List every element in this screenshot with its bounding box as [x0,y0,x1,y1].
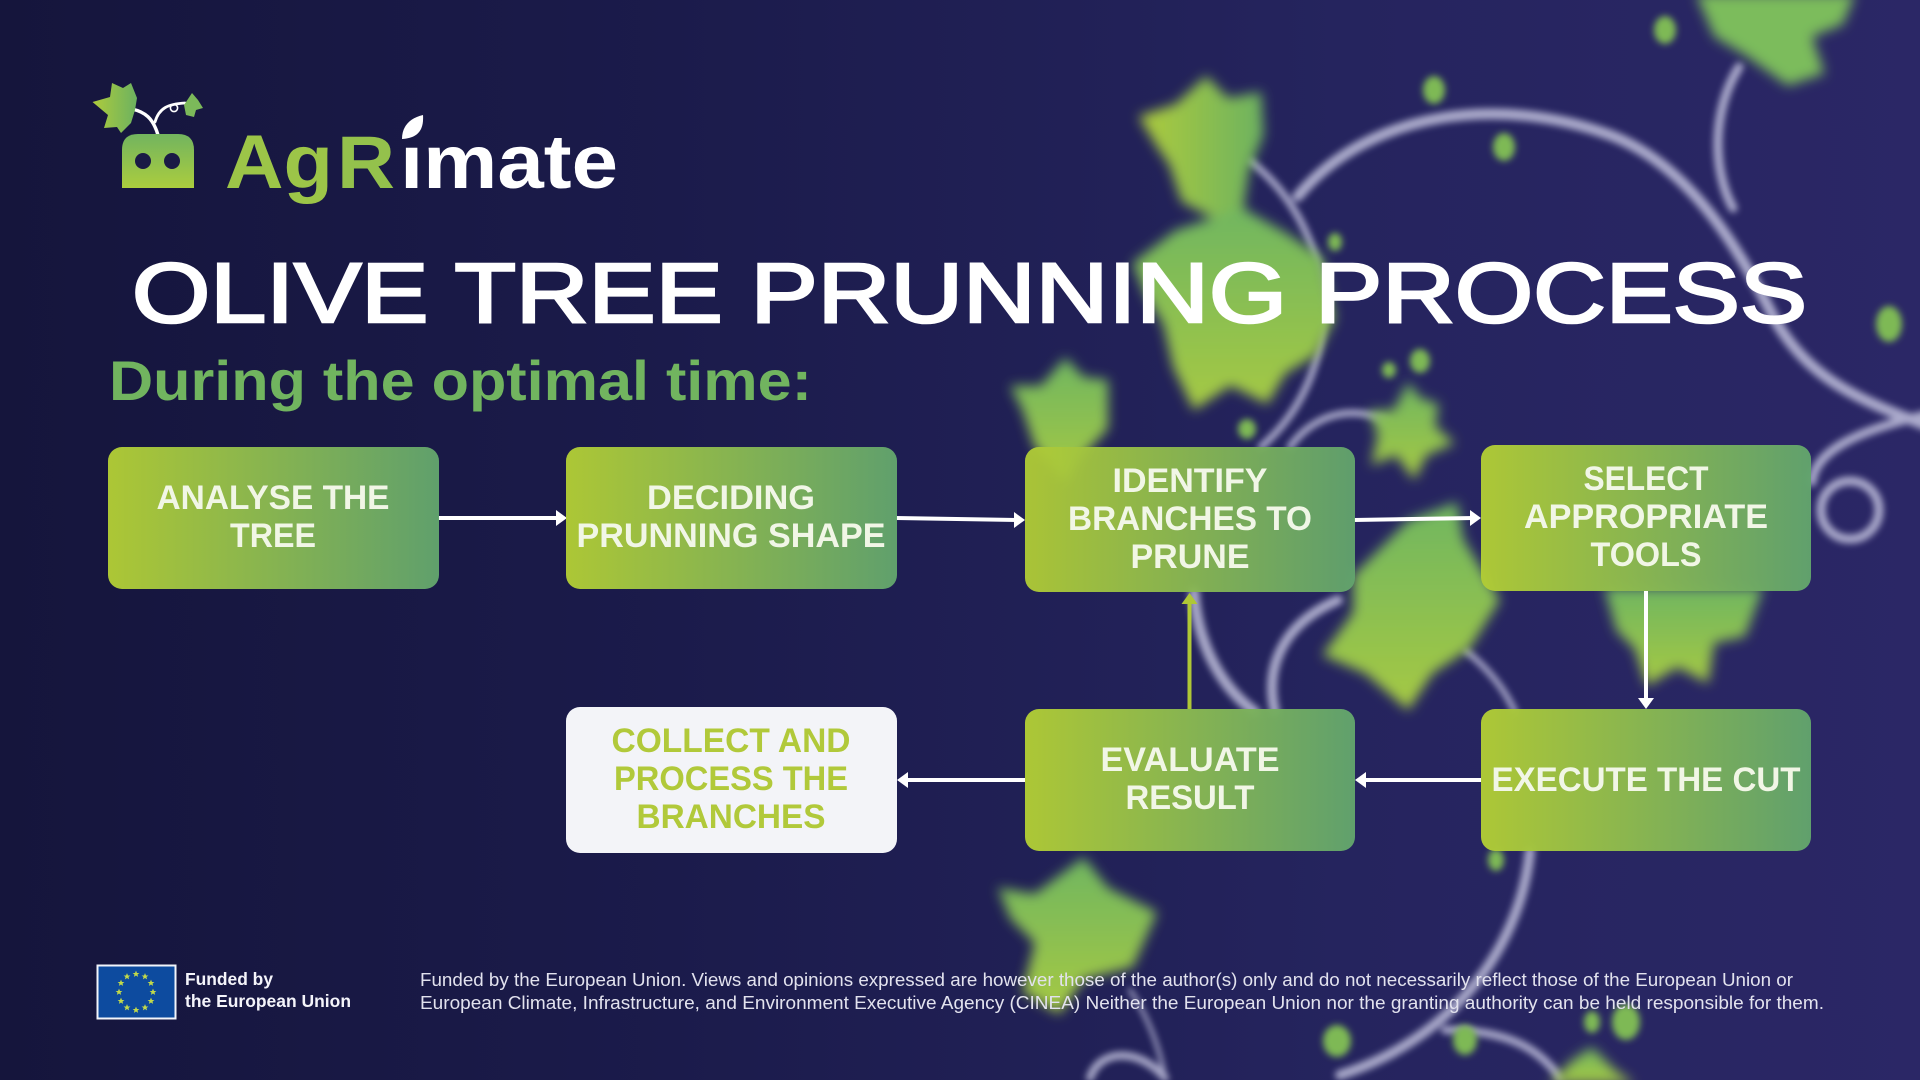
disclaimer [420,970,1824,1013]
step: evaluate result: EVALUATE [1100,741,1280,779]
title: OLIVE TREE PRUNNING PROCESS [132,246,1807,340]
step: identify branches to prune: IDENTIFY [1112,462,1268,500]
icon: leaf over i [402,115,423,139]
step: deciding prunning shape [566,447,897,589]
logo wordmark Ag: Ag [225,120,333,205]
step: identify branches to prune [1025,447,1355,592]
step: collect and process the branches: COLLECT AND [612,722,850,760]
step: evaluate result: RESULT [1126,779,1255,817]
icon: robot head [122,134,194,188]
step: analyse the tree [108,447,439,589]
disclaimer: Funded by the European Union. Views and opinions expressed are however those of the author(s) only and do not necessarily reflect those of the European Union or [420,970,1793,990]
icon: large logo leaf [92,83,137,133]
step: evaluate result [1025,709,1355,851]
logo [92,83,618,205]
icon: logo stems [132,103,185,135]
subtitle: During the optimal time: [109,349,812,412]
arrow: select to execute [1638,591,1654,709]
icon: small logo leaf [184,93,203,117]
step: select appropriate tools: APPROPRIATE [1524,498,1768,536]
disclaimer: European Climate, Infrastructure, and Environment Executive Agency (CINEA) Neither the European Union nor the granting authority can be held responsible for them. [420,993,1824,1013]
arrow: identify to select [1354,510,1481,526]
blurred vines [1090,67,1920,1078]
funded by label: the European Union [185,991,351,1011]
icon: EU flag [98,966,176,1018]
arrow: evaluate back to identify [1182,593,1198,709]
arrow: analyse to deciding [438,510,567,526]
step: execute the cut [1481,709,1811,851]
step: collect and process the branches [566,707,897,853]
step: identify branches to prune: PRUNE [1130,538,1250,576]
blurred leaves [998,0,1855,1080]
EU funding badge [98,966,351,1018]
funded by label [185,969,351,1011]
step: collect and process the branches: PROCESS THE [614,760,848,798]
step: select appropriate tools: TOOLS [1590,536,1702,574]
step: deciding prunning shape: PRUNNING SHAPE [576,517,886,555]
logo wordmark imate: ımate [400,120,618,205]
arrow: evaluate to collect [897,772,1025,788]
step: identify branches to prune: BRANCHES TO [1068,500,1312,538]
blurred small leaves [1238,16,1902,1057]
funded by label: Funded by [185,969,273,989]
robot eyes [135,153,180,169]
step: collect and process the branches: BRANCHES [636,798,826,836]
step: analyse the tree: TREE [230,517,316,555]
logo wordmark R: R [337,121,395,204]
step: select appropriate tools: SELECT [1584,460,1709,498]
step: execute the cut: EXECUTE THE CUT [1492,761,1801,799]
process flow [108,445,1811,853]
arrow: execute to evaluate [1355,772,1481,788]
arrow: deciding to identify [896,512,1025,528]
step: deciding prunning shape: DECIDING [647,479,815,517]
step: select appropriate tools [1481,445,1811,591]
step: analyse the tree: ANALYSE THE [156,479,390,517]
